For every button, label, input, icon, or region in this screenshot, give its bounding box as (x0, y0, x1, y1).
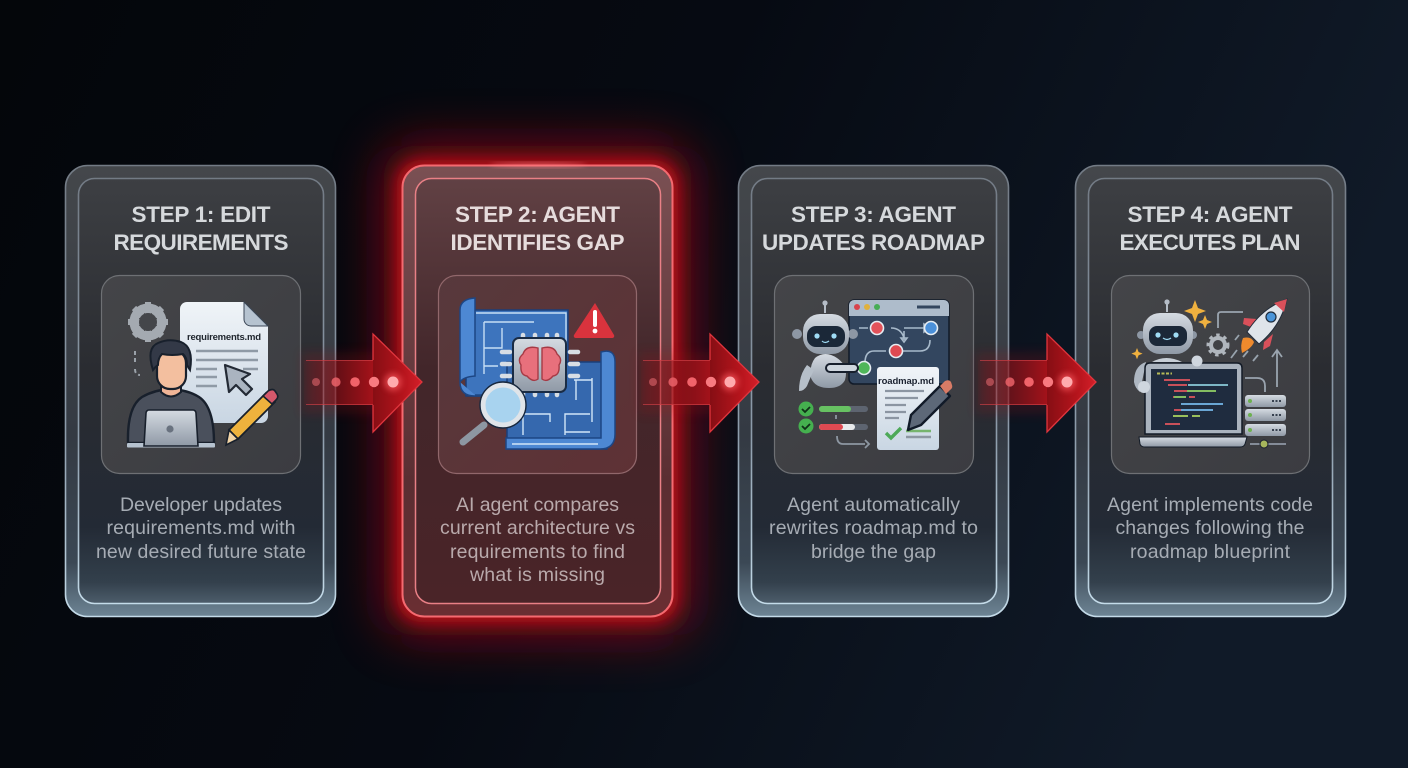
arrow: step 3 to step 4 (976, 334, 1096, 432)
arrow: step 1 to step 2 (302, 334, 422, 432)
heading: step 2 (450, 202, 624, 255)
heading: step 1: STEP 1: EDIT (132, 202, 271, 227)
icon: robot, laptop, rocket and servers (1131, 299, 1287, 448)
heading: step 2: STEP 2: AGENT (455, 202, 620, 227)
icon panel: step 2 (438, 276, 636, 474)
heading: step 3: UPDATES ROADMAP (762, 230, 985, 255)
top glint (490, 163, 586, 167)
panel: step 3 card (738, 166, 1008, 616)
heading: step 1: REQUIREMENTS (114, 230, 288, 255)
icon: robot, roadmap file and progress: roadmap.md (878, 376, 934, 387)
heading: step 1 (114, 202, 288, 255)
description: step 1: new desired future state (96, 541, 306, 563)
description: step 3: rewrites roadmap.md to (769, 517, 978, 539)
arrow: step 2 to step 3 (639, 334, 759, 432)
icon panel: step 4 (1112, 276, 1310, 474)
description: step 4: Agent implements code (1107, 494, 1313, 516)
icon panel: step 3 (774, 276, 974, 474)
glow: step 2 broad halo (384, 146, 691, 635)
description: step 2: requirements to find (450, 541, 625, 563)
panel: step 4 card (1076, 166, 1346, 616)
icon panel: step 1 (102, 276, 300, 474)
heading: step 2: IDENTIFIES GAP (450, 230, 624, 255)
description: step 1 (96, 494, 306, 563)
description: step 4: changes following the (1116, 517, 1304, 539)
icon: blueprints, AI chip, magnifier, warning (460, 298, 615, 449)
glow: step 2 tight halo (397, 160, 678, 622)
icon: developer with requirements file (127, 302, 278, 448)
icon: robot, roadmap file and progress (792, 300, 952, 450)
heading: step 4: STEP 4: AGENT (1128, 202, 1293, 227)
description: step 3: Agent automatically (787, 494, 960, 516)
description: step 1: Developer updates (120, 494, 282, 516)
panel: step 1 card (66, 166, 336, 616)
description: step 4: roadmap blueprint (1130, 541, 1291, 563)
description: step 4 (1107, 494, 1313, 563)
description: step 2: current architecture vs (440, 517, 635, 539)
heading: step 3 (762, 202, 985, 255)
description: step 1: requirements.md with (106, 517, 296, 539)
heading: step 4: EXECUTES PLAN (1120, 230, 1300, 255)
heading: step 3: STEP 3: AGENT (791, 202, 956, 227)
description: step 3: bridge the gap (811, 541, 936, 563)
description: step 3 (769, 494, 978, 563)
description: step 2: what is missing (469, 564, 605, 586)
panel: step 2 card (highlighted) (402, 166, 672, 616)
description: step 2: AI agent compares (456, 494, 619, 516)
description: step 2 (440, 494, 635, 586)
icon: developer with requirements file: requirements.md (187, 332, 261, 343)
heading: step 4 (1120, 202, 1300, 255)
